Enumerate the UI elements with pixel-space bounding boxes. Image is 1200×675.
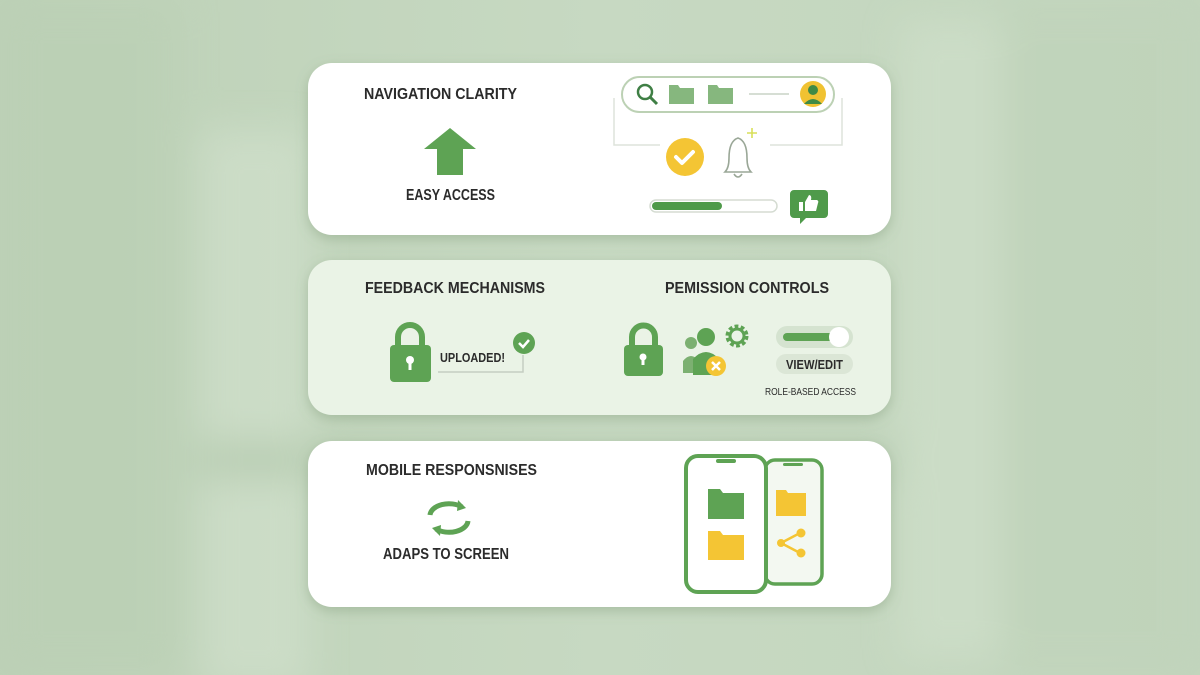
uploaded label — [438, 332, 535, 372]
view/edit pill: VIEW/EDIT — [786, 357, 843, 372]
icon: up arrow — [424, 128, 476, 175]
icon: lock 2 — [624, 326, 663, 376]
card: mobile responsiveness — [308, 441, 891, 607]
card: feedback & permissions — [308, 260, 891, 415]
icon: phones — [686, 456, 822, 592]
icon: bell — [725, 128, 757, 177]
icon: lock — [390, 325, 431, 382]
icon: check circle — [666, 138, 704, 176]
card: navigation clarity — [308, 63, 891, 235]
heading: permission controls: PEMISSION CONTROLS — [665, 280, 829, 297]
text: role-based access: ROLE-BASED ACCESS — [765, 387, 856, 398]
uploaded label: UPLOADED! — [440, 350, 505, 365]
toggle switch — [776, 326, 853, 348]
nav bar mockup — [614, 77, 842, 145]
view/edit pill — [776, 354, 853, 374]
text: adapts to screen: ADAPS TO SCREEN — [383, 546, 509, 563]
icon: sync arrows — [430, 500, 468, 536]
heading: mobile responsiveness: MOBILE RESPONSNISES — [366, 462, 537, 479]
text: easy access: EASY ACCESS — [406, 187, 495, 204]
heading: navigation clarity: NAVIGATION CLARITY — [364, 86, 517, 103]
heading: feedback mechanisms: FEEDBACK MECHANISMS — [365, 280, 545, 297]
icon: users gear — [683, 327, 746, 376]
icon: thumbs up bubble — [790, 190, 828, 224]
progress bar — [650, 200, 777, 212]
